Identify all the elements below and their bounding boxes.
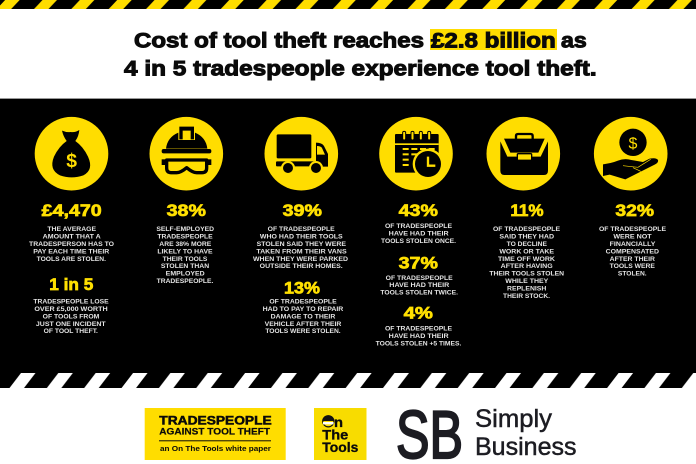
description: decline work <box>489 226 564 300</box>
logo: Simply Business <box>396 397 576 464</box>
description: taken from vans: STOLEN SAID THEY WERE <box>257 241 347 248</box>
stat: 4%: 4% <box>404 303 433 322</box>
description: self-employed: STOLEN THAN <box>161 263 210 270</box>
description: tradespeople lose: JUST ONE INCIDENT <box>36 321 106 328</box>
logo: Tradespeople Against Tool Theft: TRADESPEOPLE <box>159 414 272 428</box>
description: not compensated: OF TRADESPEOPLE <box>599 226 667 233</box>
description: decline work: REPLENISH <box>507 286 547 292</box>
description: stolen five times <box>376 326 462 348</box>
bottom hazard stripe band <box>0 373 696 388</box>
description: taken from vans: OUTSIDE THEIR HOMES. <box>260 263 343 270</box>
description: average amount <box>29 226 114 263</box>
column 4: frequency <box>376 117 462 348</box>
description: taken from vans <box>253 226 348 270</box>
icon: briefcase <box>486 117 560 190</box>
description: self-employed: EMPLOYED <box>166 270 205 278</box>
stat: 37%: 37% <box>399 253 438 272</box>
description: decline work: THEIR TOOLS STOLEN <box>489 270 564 278</box>
description: decline work: TIME OFF WORK <box>498 256 555 263</box>
description: not compensated: FINANCIALLY <box>610 241 656 248</box>
description: repair damage <box>263 298 344 335</box>
title <box>124 29 597 80</box>
description: decline work: WORK OR TAKE <box>499 248 555 256</box>
description: not compensated <box>599 226 667 278</box>
description: average amount: THE AVERAGE <box>47 226 97 233</box>
description: average amount: TOOLS ARE STOLEN. <box>37 256 106 263</box>
title: £2.8 billion <box>431 30 556 52</box>
black statistics panel <box>0 98 696 374</box>
description: decline work: TO DECLINE <box>507 241 548 248</box>
column 5: lost work <box>486 117 564 300</box>
icon: calendar and clock <box>379 117 453 190</box>
description: stolen once: HAVE HAD THEIR <box>389 230 449 238</box>
stat: 11%: 11% <box>510 201 544 220</box>
description: taken from vans: OF TRADESPEOPLE <box>268 226 335 233</box>
description: stolen twice: TOOLS STOLEN TWICE. <box>380 290 458 296</box>
description: not compensated: COMPENSATED <box>606 248 659 256</box>
description: stolen five times: OF TRADESPEOPLE <box>385 326 453 332</box>
description: tradespeople lose: OF TOOLS FROM <box>43 314 99 320</box>
description: not compensated: AFTER THEIR <box>610 256 655 263</box>
description: stolen twice <box>380 275 458 296</box>
description: not compensated: STOLEN. <box>618 270 647 278</box>
logo: On The Tools: Tools <box>322 439 359 455</box>
icon: hard hat and goggles <box>150 117 223 190</box>
description: stolen twice: HAVE HAD THEIR <box>389 282 450 289</box>
column 1: money cost <box>29 117 114 335</box>
column 2: self-employed <box>150 117 223 285</box>
column 3: vans <box>253 117 348 335</box>
description: tradespeople lose <box>33 298 109 335</box>
stat: 38%: 38% <box>167 201 206 220</box>
title: Cost of tool theft reaches <box>134 30 424 52</box>
logo: On The Tools: n <box>334 414 343 430</box>
description: repair damage: TOOLS WERE STOLEN. <box>265 328 341 335</box>
description: not compensated: WERE NOT <box>613 234 652 240</box>
description: self-employed: SELF-EMPLOYED <box>156 226 214 233</box>
column 6: compensation <box>594 117 668 278</box>
title: as <box>561 30 587 52</box>
top hazard stripe band <box>0 0 696 9</box>
description: average amount: PAY EACH TIME THEIR <box>33 248 110 256</box>
description: stolen five times: TOOLS STOLEN +5 TIMES. <box>376 340 462 348</box>
logo: Simply Business: Simply <box>475 405 553 433</box>
description: repair damage: OF TRADESPEOPLE <box>269 298 337 306</box>
logo: Tradespeople Against Tool Theft: AGAINST TOOL THEFT <box>159 427 271 437</box>
description: taken from vans: WHEN THEY WERE PARKED <box>253 256 348 263</box>
stat: £4,470: £4,470 <box>42 201 102 220</box>
description: repair damage: DAMAGE TO THEIR <box>271 314 336 320</box>
description: taken from vans: TAKEN FROM THEIR VANS <box>256 248 347 256</box>
description: self-employed: ARE 38% MORE <box>159 241 212 248</box>
description: tradespeople lose: OVER £5,000 WORTH <box>34 306 108 313</box>
description: repair damage: VEHICLE AFTER THEIR <box>265 321 342 328</box>
description: tradespeople lose: TRADESPEOPLE LOSE <box>33 298 109 306</box>
stat: 13%: 13% <box>284 278 320 297</box>
description: taken from vans: WHO HAD THEIR TOOLS <box>260 234 343 240</box>
icon: truck <box>264 117 338 190</box>
description: self-employed: TRADESPEOPLE <box>157 234 213 240</box>
logo: Tradespeople Against Tool Theft <box>145 408 286 460</box>
description: average amount: AMOUNT THAT A <box>43 234 101 240</box>
description: self-employed: THEIR TOOLS <box>163 256 208 263</box>
description: decline work: SAID THEY HAD <box>499 234 554 240</box>
stat: 39%: 39% <box>283 201 322 220</box>
description: self-employed <box>156 226 214 285</box>
description: stolen twice: OF TRADESPEOPLE <box>386 275 453 282</box>
stat: 1 in 5: 1 in 5 <box>49 275 93 294</box>
logo: On The Tools <box>314 408 366 460</box>
description: average amount: TRADESPERSON HAS TO <box>29 241 114 248</box>
description: decline work: THEIR STOCK. <box>503 293 550 300</box>
title: 4 in 5 tradespeople experience tool theft. <box>124 58 597 80</box>
stat: 43%: 43% <box>399 201 438 220</box>
description: tradespeople lose: OF TOOL THEFT. <box>44 328 98 335</box>
logo: Tradespeople Against Tool Theft: an On The Tools white paper <box>160 444 271 453</box>
icon: money bag: $ <box>66 151 77 172</box>
description: not compensated: TOOLS WERE <box>610 263 656 270</box>
description: self-employed: LIKELY TO HAVE <box>157 248 213 256</box>
description: repair damage: HAD TO PAY TO REPAIR <box>263 306 344 313</box>
icon: hand and coin <box>594 117 668 190</box>
icon: hand and coin: $ <box>629 135 638 152</box>
description: decline work: WHILE THEY <box>505 278 549 285</box>
description: stolen once: TOOLS STOLEN ONCE. <box>381 238 456 245</box>
description: stolen once: OF TRADESPEOPLE <box>385 223 453 230</box>
logo: Simply Business: Business <box>475 433 576 461</box>
description: decline work: OF TRADESPEOPLE <box>493 226 561 233</box>
description: stolen once <box>381 223 456 245</box>
description: stolen five times: HAVE HAD THEIR <box>389 333 449 340</box>
description: self-employed: TRADESPEOPLE. <box>157 278 214 285</box>
stat: 32%: 32% <box>615 201 654 220</box>
logo: On The Tools: The <box>322 427 349 443</box>
icon: money bag <box>35 117 108 190</box>
description: decline work: AFTER HAVING <box>501 263 553 270</box>
